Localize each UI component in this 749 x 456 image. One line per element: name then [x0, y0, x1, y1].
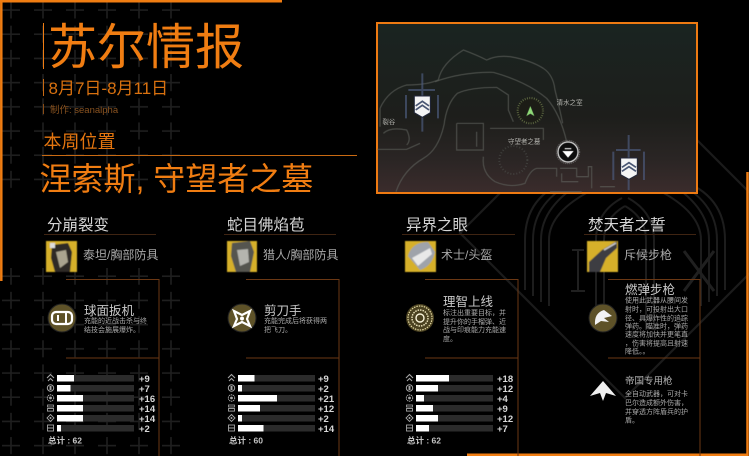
stat bars: +12: [497, 414, 513, 425]
frame: bottom right orange rules: [467, 172, 748, 455]
perk text: 理智上线: [443, 294, 494, 309]
map marker: south-east shield: [613, 135, 644, 190]
map marker: west shield: [406, 73, 438, 132]
perk text: 战与印痕能力充能速: [443, 325, 506, 334]
perk icon: [589, 304, 617, 332]
perk text: 速度将加快并更笔直: [625, 330, 688, 338]
stat bars: +2: [318, 414, 329, 425]
weapon frame text: 帝国专用枪: [625, 375, 673, 387]
perk frame: [425, 280, 518, 456]
credit: 制作: seanalpha: [50, 104, 119, 116]
perk text: 度。: [443, 334, 457, 343]
perk text: 燃弹步枪: [625, 282, 676, 297]
perk text: 结技会施展爆炸。: [84, 325, 140, 334]
column: 分崩裂变: [44, 216, 159, 456]
stat bars: +2: [139, 424, 150, 435]
stat bars: [228, 374, 335, 435]
item icon: [46, 241, 77, 272]
weapon frame text: 巴尔造成额外伤害，: [625, 398, 688, 407]
frame: top and left orange rules: [0, 0, 282, 281]
perk text: 降低。。: [625, 346, 650, 356]
map panel: [377, 23, 697, 193]
weapon frame text: 全自动武器，可对卡: [625, 389, 688, 398]
stat bars: +9: [318, 374, 329, 385]
stat total: 总计 : 62: [48, 436, 82, 446]
column: 异界之眼: [402, 216, 518, 456]
heading: 分崩裂变: [47, 216, 109, 234]
background plus grid: [0, 0, 180, 456]
heading rule: [584, 234, 696, 236]
stat total: 总计 : 62: [407, 436, 441, 446]
stat bars: [47, 374, 156, 435]
stat bars: [406, 374, 513, 435]
perk text: 使用此武器从腰间发: [625, 296, 688, 304]
stat bars: +12: [497, 384, 513, 395]
item type: 术士/头盔: [441, 247, 492, 262]
heading: 焚天者之誓: [588, 216, 666, 234]
heading rule: [402, 234, 515, 236]
map marker: player arrow: [518, 98, 543, 123]
stat bars: +2: [318, 384, 329, 395]
map labels: [382, 98, 583, 145]
perk text: [84, 304, 147, 334]
perk text: ，伤害将提高且射速: [625, 338, 688, 348]
column: 蛇目佛焰苞: [224, 216, 339, 456]
perk text: [443, 294, 506, 343]
heading rule: [224, 234, 336, 236]
stat bars: +7: [497, 424, 508, 435]
item type: 斥候步枪: [624, 247, 672, 262]
stat bars: +18: [497, 374, 513, 385]
map labels: 裂谷: [382, 117, 396, 126]
map labels: 清水之室: [557, 98, 583, 107]
location divider: [42, 155, 357, 156]
weapon frame text: 并穿透方阵盾兵的护: [625, 407, 688, 416]
stat total: 总计 : 60: [229, 436, 263, 446]
perk icon: [406, 304, 434, 332]
perk frame: [246, 280, 339, 456]
item icon: [405, 241, 436, 272]
date: 8月7日-8月11日: [48, 79, 168, 98]
item icon: [227, 241, 257, 272]
title: 苏尔情报: [48, 21, 244, 75]
weapon frame text: 盾。: [625, 416, 639, 424]
heading rule: [44, 234, 156, 236]
item type: 猎人/胸部防具: [263, 247, 338, 262]
weapon frame text: [625, 375, 688, 424]
location name: 涅索斯, 守望者之墓: [40, 161, 313, 197]
item type: 泰坦/胸部防具: [83, 247, 158, 262]
map outlines: [377, 50, 615, 192]
background emblem: [460, 68, 749, 398]
stat bars: +14: [139, 414, 156, 425]
heading: 蛇目佛焰苞: [227, 216, 305, 234]
stat bars: +16: [139, 394, 155, 405]
perk text: 弹药。瞄准时，弹药: [625, 322, 688, 330]
stat bars: +12: [318, 404, 334, 415]
column: 焚天者之誓: [584, 216, 700, 456]
map marker: drop point: [556, 140, 580, 164]
stat bars: +9: [139, 374, 150, 385]
perk text: 充能的近战击杀与终: [84, 316, 147, 325]
perk text: [264, 303, 327, 334]
stat bars: +7: [139, 384, 150, 395]
stat bars: +21: [318, 394, 335, 405]
perk text: 把飞刀。: [264, 325, 292, 334]
perk text: 射时，可投射出大口: [625, 304, 688, 314]
weapon frame icon: [590, 381, 616, 401]
stat bars: +4: [497, 394, 509, 405]
perk frame: [66, 280, 159, 456]
stat bars: +9: [497, 404, 508, 415]
stat bars: +14: [318, 424, 335, 435]
perk text: 提升你的手榴弹、近: [443, 317, 506, 326]
location label: 本周位置: [44, 132, 116, 152]
perk text: 径、具爆炸性的追踪: [625, 314, 688, 322]
perk frame: [608, 280, 700, 456]
perk text: 标注出重要目标，并: [443, 308, 506, 317]
perk text: 剪刀手: [264, 303, 302, 318]
heading: 异界之眼: [406, 216, 468, 234]
perk text: 充能完成后将获得两: [264, 316, 327, 325]
perk icon: [228, 304, 256, 332]
perk icon: [48, 304, 76, 332]
perk text: 球面扳机: [84, 304, 135, 318]
perk text: [625, 282, 688, 356]
map labels: 守望者之墓: [508, 136, 541, 145]
stat bars: +14: [139, 404, 156, 415]
item icon: [587, 241, 618, 272]
